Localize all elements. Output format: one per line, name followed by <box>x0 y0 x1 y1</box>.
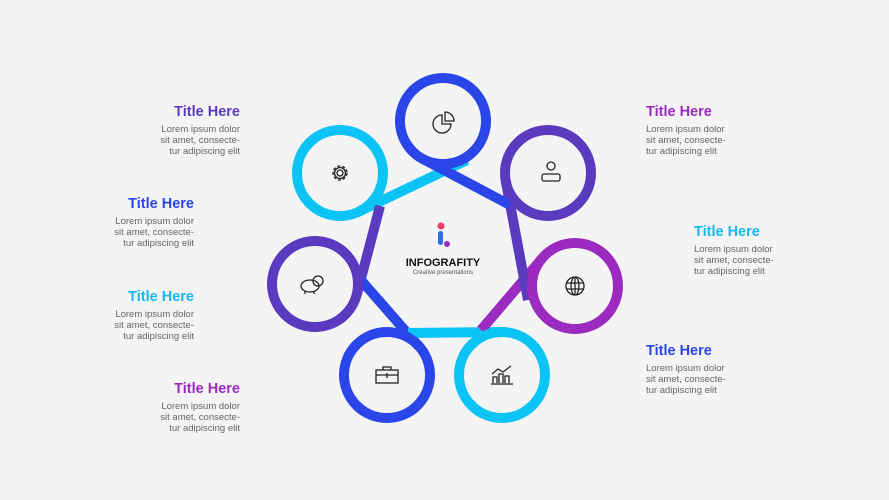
text: left 4: Title Here <box>174 381 240 397</box>
loop: top blue <box>400 78 486 164</box>
text: right 3: sit amet, consecte- <box>646 374 726 385</box>
text: left 1: sit amet, consecte- <box>160 135 240 146</box>
icon: piggy <box>301 276 323 294</box>
text: left 3: Title Here <box>128 289 194 305</box>
text: left 3 <box>114 289 194 342</box>
text: right 3: Title Here <box>646 343 712 359</box>
tail: gear cyan <box>358 160 467 212</box>
text: right 2: sit amet, consecte- <box>694 255 774 266</box>
text: left 1: tur adipiscing elit <box>169 146 240 157</box>
text: right 3: Lorem ipsum dolor <box>646 363 725 374</box>
text: right 1: Lorem ipsum dolor <box>646 124 725 135</box>
icon: pie chart <box>433 112 454 133</box>
text: left 3: Lorem ipsum dolor <box>115 309 194 320</box>
text: left 1 <box>160 104 240 157</box>
text: right 3 <box>646 343 726 396</box>
text: left 3: tur adipiscing elit <box>123 331 194 342</box>
text: left 1: Title Here <box>174 104 240 120</box>
tail: briefcase blue <box>360 279 419 346</box>
text: right 1: sit amet, consecte- <box>646 135 726 146</box>
loop: briefcase blue <box>344 332 430 418</box>
tail: chart cyan <box>408 332 502 333</box>
text: left 2: tur adipiscing elit <box>123 238 194 249</box>
logo <box>438 222 450 247</box>
tail: piggy purple <box>357 206 380 294</box>
icon: chart <box>491 366 513 384</box>
brand: INFOGRAFITY <box>406 257 481 269</box>
text: left 4: tur adipiscing elit <box>169 423 240 434</box>
text: left 1: Lorem ipsum dolor <box>161 124 240 135</box>
tail: person purple <box>506 181 528 300</box>
text: left 2: sit amet, consecte- <box>114 227 194 238</box>
text: right 2: Lorem ipsum dolor <box>694 244 773 255</box>
text: left 4: sit amet, consecte- <box>160 412 240 423</box>
text: right 2: Title Here <box>694 224 760 240</box>
loop: person purple <box>505 130 591 216</box>
icon: globe <box>566 277 584 295</box>
loop: chart cyan <box>459 332 545 418</box>
text: left 2: Title Here <box>128 196 194 212</box>
text: left 2 <box>114 196 194 249</box>
text: right 2: tur adipiscing elit <box>694 266 765 277</box>
text: left 2: Lorem ipsum dolor <box>115 216 194 227</box>
text: right 3: tur adipiscing elit <box>646 385 717 396</box>
text: right 1: tur adipiscing elit <box>646 146 717 157</box>
text: left 4: Lorem ipsum dolor <box>161 401 240 412</box>
diagram: Creative presentations <box>413 270 473 276</box>
text: left 3: sit amet, consecte- <box>114 320 194 331</box>
icon: person <box>542 162 560 181</box>
text: right 2 <box>694 224 774 277</box>
loop: globe magenta <box>532 243 618 329</box>
text: right 1: Title Here <box>646 104 712 120</box>
loop: piggy purple <box>272 241 358 327</box>
text: left 4 <box>160 381 240 434</box>
icon: briefcase <box>376 367 398 383</box>
icon: gear <box>333 166 347 180</box>
loop: gear cyan <box>297 130 383 216</box>
tail: top blue <box>423 159 510 205</box>
tail: globe magenta <box>481 258 542 330</box>
text: right 1 <box>646 104 726 157</box>
